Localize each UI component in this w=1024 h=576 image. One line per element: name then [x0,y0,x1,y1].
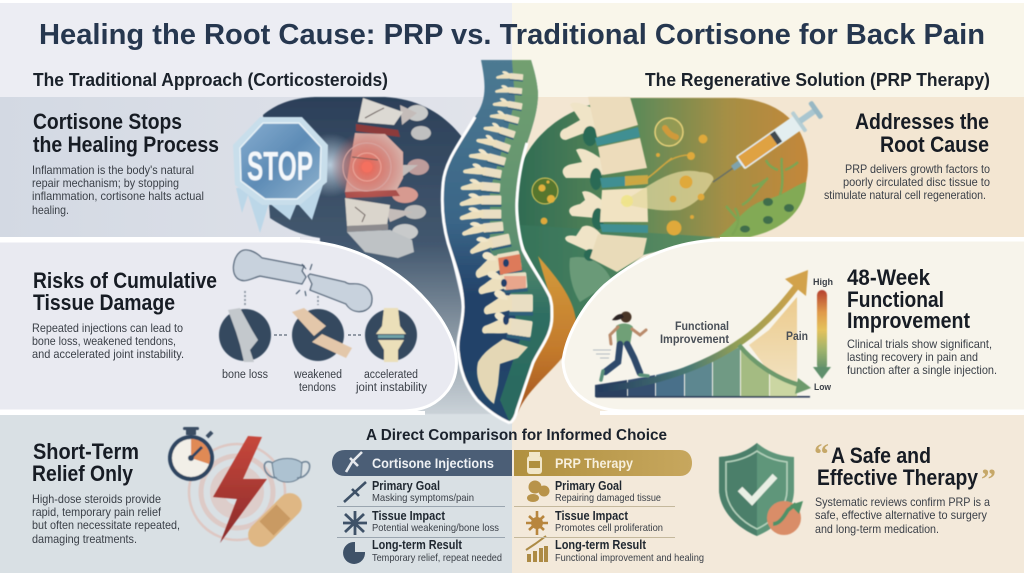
band: top row right [512,97,1024,237]
label: weakened tendons: weakened [293,369,342,381]
label: functional improvement: Functional [675,321,729,333]
text: repeated injections: and accelerated joint instability. [32,347,184,361]
heading: 48-week functional improvement: Improvement [847,308,971,333]
label: accelerated joint instability: accelerated [364,369,418,381]
heading: risks of cumulative tissue damage [33,268,217,315]
illustration: healthy vertebrae [560,97,648,302]
background: left half [0,3,512,573]
text: inflammation explanation: Inflammation is the body's natural [32,163,194,177]
text: PRP explanation: stimulate natural cell regeneration. [824,188,986,202]
divider band right [720,237,1024,241]
illustration: platelet spray and cells [532,118,806,237]
text: repeated injections: Repeated injections can lead to [32,321,183,335]
label: accelerated joint instability: joint instability [355,382,427,394]
icon: bandage [243,488,307,552]
icon: bone loss [219,308,271,362]
row: long-term result [343,538,502,564]
illustration: cortisone damaged spine backdrop [263,97,512,425]
text: systematic reviews: Systematic reviews confirm PRP is a [815,495,990,509]
text: high-dose steroids: rapid, temporary pain relief [32,505,162,519]
icon: frozen stop sign: STOP [247,143,313,189]
row: long-term result [526,536,704,564]
icon: frozen stop sign [233,117,328,233]
label: functional improvement [660,321,729,346]
label: low: Low [814,382,832,393]
heading: cortisone stops the healing process [33,109,219,157]
heading: safe and effective therapy: Effective Therapy [817,465,979,490]
heading: short-term relief only: Short-Term [33,439,139,464]
label: high: High [813,277,833,288]
band: middle row right backdrop [512,241,1024,412]
label: weakened tendons [293,369,342,394]
icon: joint instability [365,308,417,362]
icon: PRP vial [527,452,542,474]
row: primary goal: Primary Goal [555,479,622,493]
row: primary goal [527,479,661,504]
text: PRP explanation [824,162,990,202]
divider band lower left [0,411,425,415]
text: clinical trials: lasting recovery in pain and [847,350,978,364]
text: repeated injections: bone loss, weakened tendons, [32,334,176,348]
row: primary goal: Repairing damaged tissue [555,492,661,504]
label: bone loss: bone loss [222,369,268,381]
label: weakened tendons: tendons [299,382,336,394]
heading: short-term relief only [32,439,139,486]
text: high-dose steroids: but often necessitate repeated, [32,518,180,532]
band: top row left [0,97,512,237]
heading: addresses the root cause: Root Cause [880,132,989,157]
illustration: orange flowing ribbon [517,256,576,414]
title: Healing the Root Cause: PRP vs. Traditional Cortisone for Back Pain [39,19,985,51]
heading: cortisone stops the healing process: Cortisone Stops [33,109,182,134]
illustration: regenerative green backdrop [515,98,808,332]
row: tissue impact: Tissue Impact [555,509,629,523]
divider band [0,237,300,241]
heading: safe and effective therapy: A Safe and [831,443,931,468]
text: repeated injections [32,321,184,361]
text: high-dose steroids: damaging treatments. [32,532,137,546]
text: inflammation explanation: repair mechanism; by stopping [32,176,179,190]
text: clinical trials: Clinical trials show significant, [847,337,992,351]
heading: 48-week functional improvement [847,265,971,333]
icon: pain rings [189,444,285,540]
heading: 48-week functional improvement: Functional [847,287,944,312]
row: tissue impact: Tissue Impact [372,509,446,523]
row: primary goal: Primary Goal [372,479,440,493]
heading: regenerative solution: The Regenerative Solution (PRP Therapy) [645,70,990,90]
text: PRP explanation: PRP delivers growth factors to [845,162,990,176]
panel: cumulative tissue damage [0,241,456,411]
row: long-term result: Long-term Result [555,538,647,552]
pain scale thermometer [813,290,831,379]
panel: functional improvement [563,240,1024,411]
text: clinical trials [847,337,997,377]
heading: direct comparison: A Direct Comparison for Informed Choice [366,427,667,444]
icon: lightning bolt [213,436,267,543]
dashes between icons [274,334,362,336]
label: PRP therapy: PRP Therapy [555,455,633,471]
icon: safety shield [719,443,803,536]
icon: fractured bone [233,250,372,312]
band: bottom row right [512,412,1024,573]
illustration: spine vertebrae [460,70,533,404]
divider band lower right [600,411,1024,415]
quote mark close: ” [981,463,996,496]
row: tissue impact: Potential weakening/bone loss [372,522,499,534]
panel: short-term relief only [32,427,310,552]
text: PRP explanation: poorly circulated disc tissue to [843,175,990,189]
text: systematic reviews [815,495,990,536]
label: cortisone injections: Cortisone Injections [372,455,494,471]
chart: pain and function curves [595,270,811,398]
text: systematic reviews: safe, effective alternative to surgery [815,508,987,522]
quote mark open: “ [814,438,829,471]
row: tissue impact [343,509,499,535]
panel: PRP comparison column [514,450,704,564]
text: high-dose steroids: High-dose steroids provide [32,492,161,506]
icon: weakened tendons [292,308,352,361]
heading: traditional approach: The Traditional Approach (Corticosteroids) [33,70,388,90]
row: long-term result: Temporary relief, repeat needed [372,552,502,564]
text: clinical trials: function after a single injection. [847,363,997,377]
illustration: central spine ribbon [442,60,552,423]
row: primary goal [344,479,474,504]
text: inflammation explanation: inflammation, cortisone halts actual [32,189,204,203]
icon: cortisone injection [346,452,362,472]
text: high-dose steroids [32,492,180,546]
label: pain: Pain [786,331,808,343]
heading: short-term relief only: Relief Only [32,461,134,486]
area bars [595,347,797,397]
icon: stopwatch [168,427,214,481]
heading: addresses the root cause: Addresses the [855,109,989,134]
text: systematic reviews: and long-term medication. [815,522,939,536]
heading: risks of cumulative tissue damage: Risks of Cumulative [33,268,217,293]
row: tissue impact: Promotes cell proliferation [555,522,663,534]
background: right half [512,3,1024,573]
label: accelerated joint instability [355,369,427,394]
panel: cortisone comparison column [332,450,512,564]
heading: addresses the root cause [855,109,989,157]
heading: risks of cumulative tissue damage: Tissue Damage [33,290,175,315]
row: long-term result: Functional improvement and healing [555,552,704,564]
row: tissue impact [526,509,663,535]
row: long-term result: Long-term Result [372,538,463,552]
pain area [749,297,797,385]
text: inflammation explanation: healing. [32,203,69,217]
row: primary goal: Masking symptoms/pain [372,492,474,504]
icon: syringe [706,99,825,192]
icon: face mask [264,458,310,482]
label: functional improvement: Improvement [660,334,729,346]
heading: 48-week functional improvement: 48-Week [847,265,931,290]
text: inflammation explanation [32,163,204,217]
band: bottom row left [0,412,512,573]
heading: cortisone stops the healing process: the Healing Process [33,132,219,157]
heading: safe and effective therapy [817,443,979,490]
icon: runner [593,312,648,380]
